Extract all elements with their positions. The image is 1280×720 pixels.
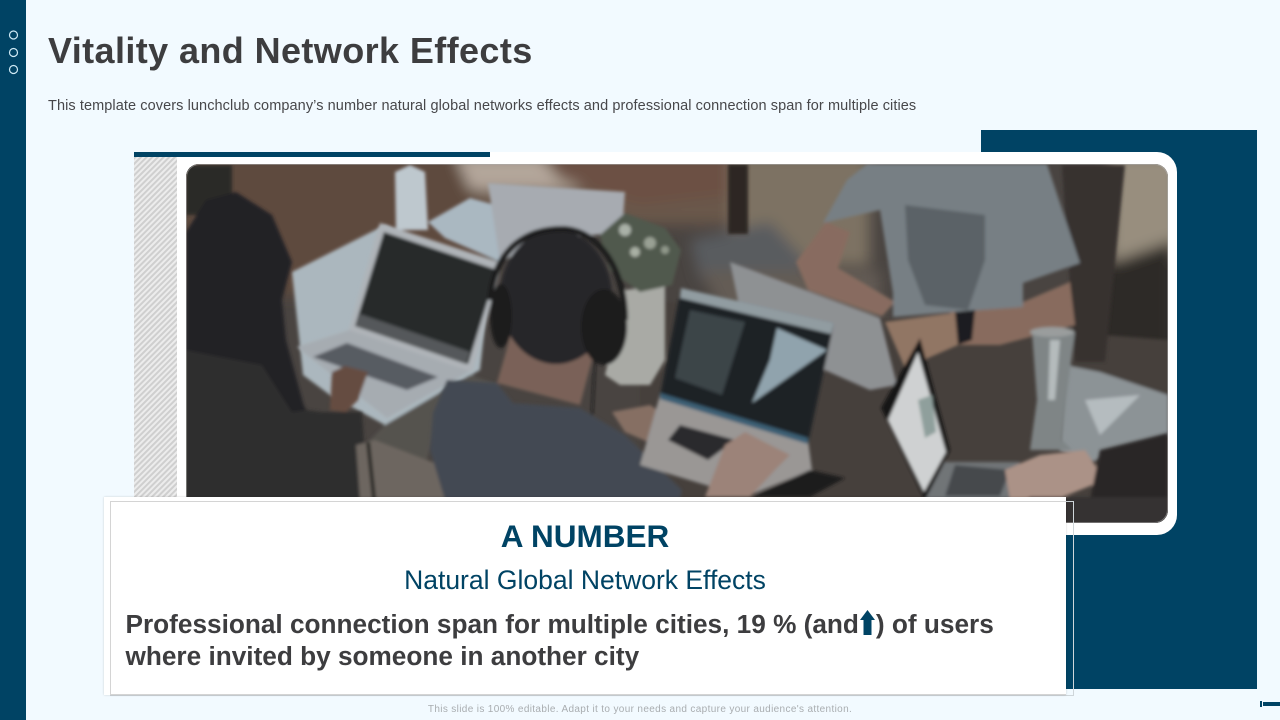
right chair: [1062, 165, 1125, 362]
corner mark: [1260, 701, 1280, 707]
subtitle: This template covers lunchclub company’s number natural global networks effects and professional connection span for multiple cities: [48, 98, 916, 114]
navy accent bar: [134, 152, 490, 157]
back laptop: [488, 183, 625, 262]
watch: [955, 310, 975, 345]
card body text: [125, 609, 994, 671]
t-shirt: [823, 164, 1080, 317]
woman: [186, 345, 368, 500]
plant + vase: [605, 285, 665, 385]
chair: [354, 440, 446, 497]
offset card outline: [110, 501, 1074, 696]
card inner border: [110, 501, 1066, 695]
blurred background: [186, 164, 1168, 340]
dark chair left top: [186, 165, 232, 215]
table surfaces: [292, 225, 1170, 530]
left sidebar: [0, 0, 26, 720]
grey laptop back: [730, 262, 897, 390]
laptop 2: [640, 395, 812, 497]
bottle: [395, 165, 428, 230]
hatched strip: [134, 157, 177, 497]
card heading: A NUMBER: [501, 518, 669, 554]
glass: [1030, 332, 1075, 450]
icon: three navigation circles: [8, 30, 18, 74]
title: Vitality and Network Effects: [48, 30, 533, 71]
card body text: where invited by someone in another city: [126, 641, 639, 671]
card subheading: Natural Global Network Effects: [404, 565, 766, 595]
text card: [104, 497, 1066, 695]
card body text: Professional connection span for multiple cities, 19 % (and ) of users: [126, 609, 994, 639]
laptop 1: [297, 330, 472, 418]
laptop 3: [881, 338, 950, 500]
navy backdrop block: [981, 130, 1257, 689]
white photo frame: [177, 152, 1177, 535]
man: [496, 335, 594, 406]
footer note: This slide is 100% editable. Adapt it to your needs and capture your audience's attention.: [428, 704, 852, 715]
hand + sleeve: [1005, 450, 1105, 500]
top-right person arms: [796, 222, 895, 316]
photo: team working on laptops: [186, 164, 1168, 523]
